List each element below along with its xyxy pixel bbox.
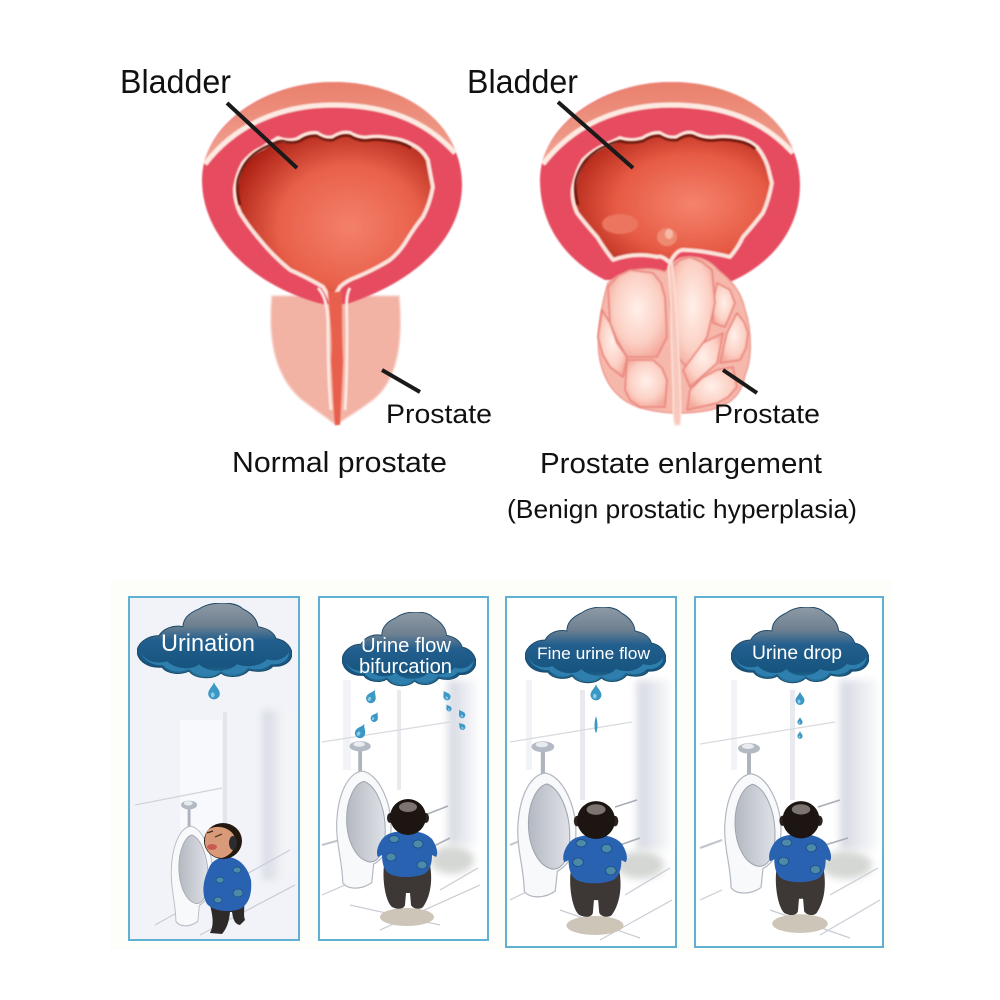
panel 3 drops: [591, 684, 601, 733]
normal urethra: [318, 288, 350, 425]
normal lumen dark rim: [237, 136, 411, 205]
labels: bladder and prostate: Bladder: [467, 63, 578, 100]
enlarged urethra: [668, 262, 681, 425]
enlarged bladder wall: [540, 82, 800, 282]
panel 4 man: [769, 801, 831, 933]
caption: prostate enlargement: Prostate enlargement: [540, 448, 822, 480]
panel: urination: [129, 597, 299, 940]
lower strip background: [110, 580, 892, 950]
panel 2 urinal: [337, 741, 391, 888]
prostate lobes: [598, 257, 748, 410]
panel 3 wall: [510, 680, 672, 940]
panel 3 man: [563, 801, 627, 935]
leader lines: [227, 102, 757, 393]
panel 3 urinal: [518, 741, 576, 897]
panel 1 frame: [129, 597, 299, 940]
panel: normal prostate: [202, 82, 462, 425]
panel 2 wall: [322, 680, 480, 930]
panel 3 frame: [506, 597, 676, 947]
enlarged lumen dark rim: [575, 136, 755, 205]
panel 4 cloud: [731, 607, 869, 683]
panel 4 frame: [695, 597, 883, 947]
panel 2 frame: [319, 597, 488, 940]
labels: bladder and prostate: Prostate: [714, 399, 820, 429]
panel 2 cloud: Urine flow: [361, 635, 452, 657]
panel 2 cloud: [342, 612, 476, 686]
panel 2 split drops: [353, 688, 467, 740]
panel: urine drop: [695, 597, 883, 947]
panel 2 man: [377, 799, 437, 926]
labels: bladder and prostate: [120, 63, 820, 429]
normal bladder lumen: [235, 132, 433, 303]
labels: bladder and prostate: Prostate: [386, 399, 492, 429]
normal prostate gland: [271, 296, 400, 425]
caption: normal prostate: Normal prostate: [232, 447, 447, 479]
panel 4 cloud: Urine drop: [752, 643, 842, 664]
caption: benign prostatic hyperplasia: (Benign prostatic hyperplasia): [507, 494, 857, 524]
labels: bladder and prostate: Bladder: [120, 63, 231, 100]
panel: enlarged prostate: [540, 82, 800, 425]
panel 1 cloud: [137, 603, 292, 678]
panel 1 drop: [208, 682, 220, 699]
panel 3 cloud: Fine urine flow: [537, 644, 651, 663]
panel 1 man looking up: [203, 823, 251, 934]
panel 1 wall: [135, 710, 295, 935]
panel: urine flow bifurcation: [319, 597, 488, 940]
bladder neck bumps: [602, 214, 677, 246]
enlarged bladder lumen: [572, 132, 772, 263]
panel 4 drops: [796, 692, 804, 739]
panel: fine urine flow: [506, 597, 676, 947]
panel 1 urinal: [171, 801, 213, 926]
panel 2 cloud: bifurcation: [359, 656, 452, 678]
panel 4 wall: [700, 680, 880, 938]
panel 4 urinal: [725, 743, 781, 893]
panel 3 cloud: [525, 607, 666, 683]
normal bladder wall: [202, 82, 462, 304]
panel 1 cloud: Urination: [161, 630, 255, 657]
prostate mass backing: [598, 257, 750, 413]
